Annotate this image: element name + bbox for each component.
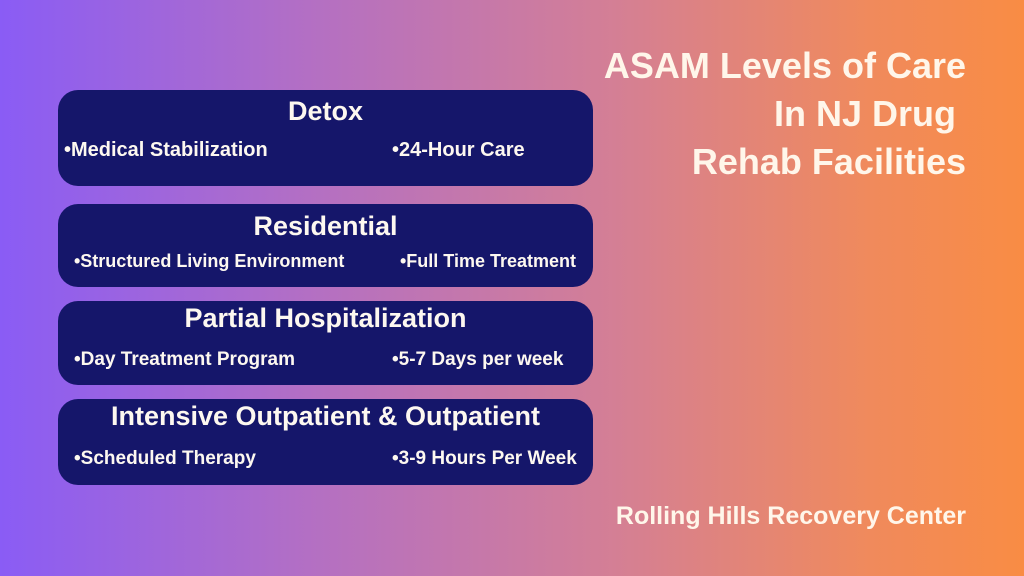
panel: partial hospitalization <box>58 301 593 385</box>
panel: detox <box>58 90 593 186</box>
panel: intensive outpatient <box>58 399 593 485</box>
bullet: 5-7 days: •5-7 Days per week <box>392 349 563 370</box>
title: ASAM Levels of Care <box>604 45 966 86</box>
title: Rehab Facilities <box>692 141 966 182</box>
title: In NJ Drug <box>774 93 956 134</box>
heading: partial hospitalization: Partial Hospitalization <box>184 303 467 333</box>
title <box>604 45 966 182</box>
panel: residential <box>58 204 593 287</box>
bullet: scheduled therapy: •Scheduled Therapy <box>74 448 256 469</box>
bullet: structured living: •Structured Living Environment <box>74 251 344 271</box>
bullet: 3-9 hours: •3-9 Hours Per Week <box>392 448 577 469</box>
heading: residential: Residential <box>253 211 398 241</box>
bullet: day treatment: •Day Treatment Program <box>74 349 295 370</box>
bullet: full time treatment: •Full Time Treatment <box>400 251 576 271</box>
footer: organization name: Rolling Hills Recovery Center <box>616 502 966 530</box>
bullet: 24-hour care: •24-Hour Care <box>392 139 525 161</box>
heading: detox: Detox <box>288 96 363 126</box>
bullet: medical stabilization: •Medical Stabilization <box>64 139 268 161</box>
heading: intensive outpatient: Intensive Outpatient & Outpatient <box>111 401 540 431</box>
